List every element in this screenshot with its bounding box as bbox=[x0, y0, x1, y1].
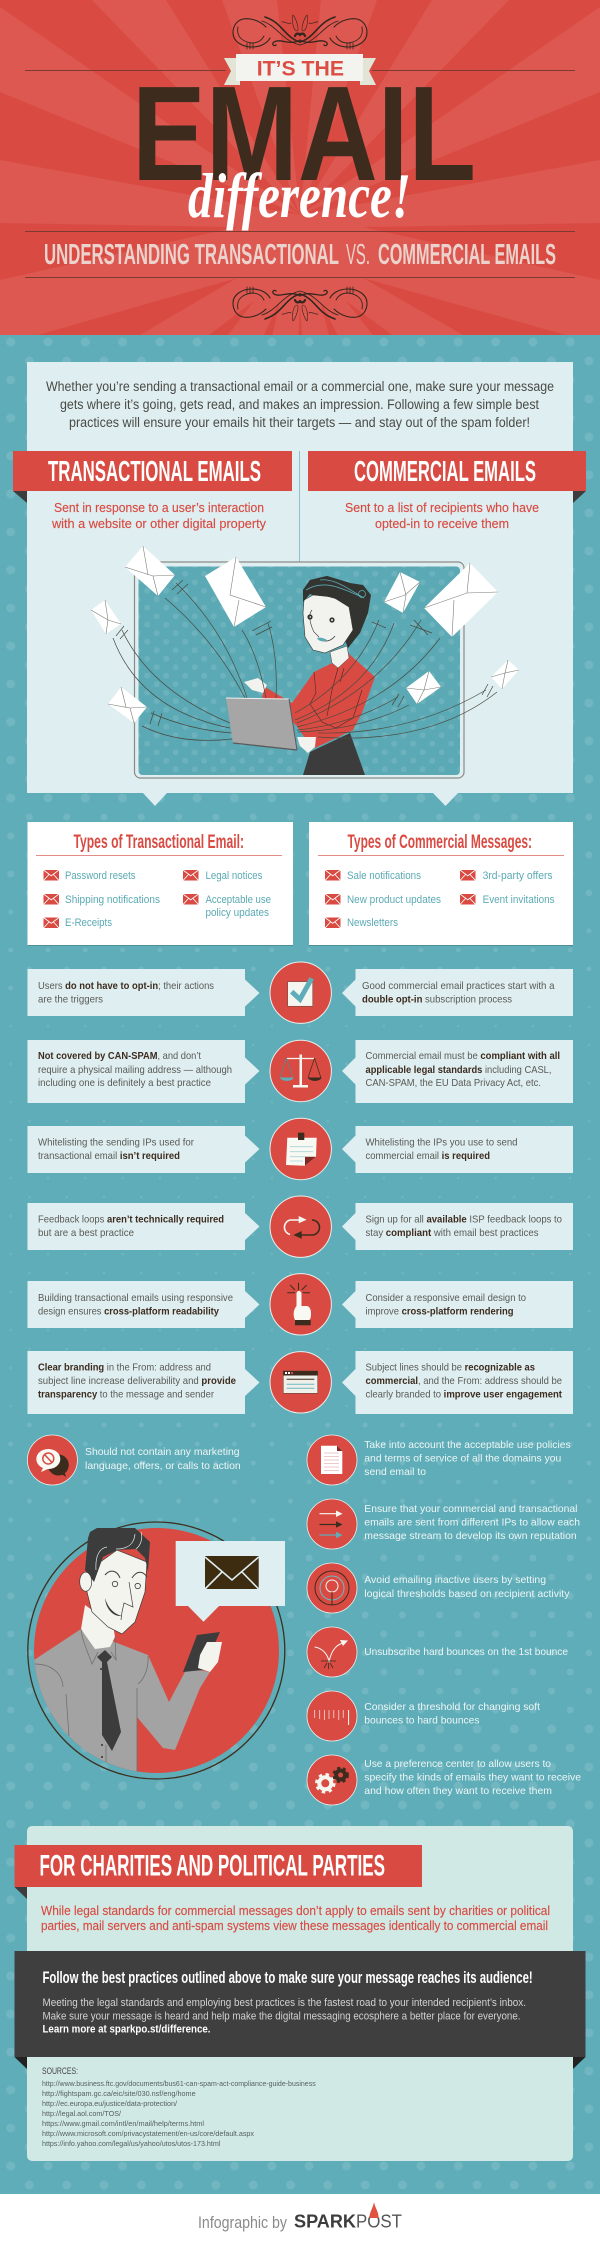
tip: soft bounces bbox=[307, 1691, 540, 1741]
left callout: Feedback loops aren’t technically required bbox=[38, 1214, 224, 1226]
tip: preference center: specify the kinds of emails they want to receive bbox=[364, 1772, 581, 1784]
sources: https://www.gmail.com/intl/en/mail/help/terms.html bbox=[42, 2119, 204, 2128]
right callout bbox=[342, 1126, 573, 1173]
tip: acceptable use policies bbox=[307, 1435, 571, 1485]
panel: intro and comparison bbox=[13, 362, 586, 806]
ribbon: it's the bbox=[224, 54, 376, 85]
transactional description bbox=[51, 500, 266, 531]
transactional description: with a website or other digital property bbox=[51, 516, 266, 531]
charities text: While legal standards for commercial messages don’t apply to emails sent by charities or political bbox=[41, 1903, 550, 1918]
list item: Legal notices bbox=[206, 870, 263, 882]
sources: https://info.yahoo.com/legal/us/yahoo/utos/utos-173.html bbox=[42, 2139, 221, 2148]
header rule lines bbox=[25, 70, 575, 278]
icon: browser window bbox=[270, 1352, 331, 1413]
tip: separate ips bbox=[307, 1499, 580, 1549]
right callout: Sign up for all available ISP feedback loops to bbox=[366, 1214, 562, 1226]
right callout bbox=[342, 1203, 573, 1250]
right callout: clearly branded to improve user engagement bbox=[366, 1390, 562, 1400]
left callout: transparency to the message and sender bbox=[38, 1390, 214, 1400]
header sunburst bbox=[0, 0, 600, 335]
tip: no marketing language: language, offers, or calls to action bbox=[85, 1461, 241, 1472]
list item: Sale notifications bbox=[347, 870, 421, 882]
icon: flame bbox=[369, 2202, 379, 2218]
speech bubble with envelope bbox=[176, 1541, 285, 1622]
right callout: CAN-SPAM, the EU Data Privacy Act, etc. bbox=[366, 1078, 541, 1089]
right callout: Subject lines should be recognizable as bbox=[366, 1362, 535, 1374]
icon: checkbox bbox=[270, 962, 331, 1023]
right callout: commercial, and the From: address should be bbox=[366, 1376, 562, 1387]
tip: acceptable use policies: Take into account the acceptable use policies bbox=[364, 1440, 571, 1451]
subtitle: VS. bbox=[346, 239, 370, 271]
phone and hand bbox=[183, 1632, 222, 1672]
right callout bbox=[342, 969, 573, 1016]
man head and tie bbox=[80, 1528, 150, 1751]
left callout bbox=[28, 1203, 260, 1250]
list item bbox=[44, 870, 136, 882]
right callout: Whitelisting the IPs you use to send bbox=[366, 1138, 518, 1148]
row: feedback loops bbox=[28, 1196, 573, 1257]
heading: Types of Transactional Email: bbox=[74, 831, 244, 853]
footer credit: SPARK bbox=[294, 2212, 356, 2232]
right callout bbox=[342, 1351, 573, 1414]
tip: soft bounces: bounces to hard bounces bbox=[364, 1716, 480, 1726]
tip: preference center: and how often they want to receive them bbox=[364, 1786, 552, 1797]
row: branding bbox=[28, 1351, 573, 1414]
man body bbox=[34, 1629, 210, 1772]
left callout bbox=[28, 1040, 260, 1103]
sources: http://legal.aol.com/TOS/ bbox=[42, 2109, 122, 2118]
tip: no marketing language: Should not contain any marketing bbox=[85, 1447, 240, 1458]
top ornament bbox=[233, 15, 367, 49]
commercial description: Sent to a list of recipients who have bbox=[345, 500, 539, 515]
left callout: require a physical mailing address — although bbox=[38, 1065, 232, 1076]
right callout bbox=[342, 1281, 573, 1328]
list item: Newsletters bbox=[347, 917, 398, 929]
icon: bounce bbox=[307, 1627, 357, 1677]
tip: soft bounces: Consider a threshold for changing soft bbox=[364, 1702, 540, 1713]
icon: loop bbox=[270, 1196, 331, 1257]
left callout: transactional email isn’t required bbox=[38, 1151, 180, 1162]
band: call to action: Make sure your message is heard and help make the digital messaging ecosphere a better place for everyone. bbox=[42, 2010, 520, 2022]
list item: E-Receipts bbox=[65, 917, 112, 929]
woman bbox=[244, 576, 375, 775]
right callout bbox=[342, 1040, 573, 1103]
left callout: including one is definitely a best practice bbox=[38, 1078, 211, 1089]
left callout: Not covered by CAN-SPAM, and don’t bbox=[38, 1051, 201, 1062]
icon: scales bbox=[270, 1040, 331, 1102]
left callout: Whitelisting the sending IPs used for bbox=[38, 1138, 194, 1148]
list item bbox=[44, 917, 112, 929]
left callout bbox=[28, 969, 260, 1016]
tip: acceptable use policies: send email to bbox=[364, 1467, 426, 1478]
row: responsive bbox=[28, 1274, 573, 1335]
footer credit bbox=[198, 2202, 402, 2232]
tip: preference center: Use a preference center to allow users to bbox=[364, 1759, 551, 1770]
right callout: stay compliant with email best practices bbox=[366, 1228, 538, 1239]
icon: note bbox=[270, 1118, 331, 1180]
icon: document bbox=[307, 1435, 357, 1485]
charities text bbox=[41, 1903, 550, 1933]
list item: Acceptable use bbox=[206, 894, 271, 906]
list item: Event invitations bbox=[483, 894, 555, 906]
icon: gears bbox=[307, 1755, 357, 1805]
band: call to action: Meeting the legal standards and employing best practices is the fastest road to your intended recipient’s inbox. bbox=[42, 1997, 526, 2009]
transactional description: Sent in response to a user’s interaction bbox=[54, 500, 264, 515]
illustration: woman sending emails bbox=[91, 546, 519, 778]
icon: arrows bbox=[307, 1499, 357, 1549]
right callout: Consider a responsive email design to bbox=[366, 1293, 526, 1304]
list item: policy updates bbox=[206, 907, 269, 919]
tip: separate ips: Ensure that your commercial and transactional bbox=[364, 1504, 578, 1515]
panel: types of transactional email bbox=[28, 822, 293, 946]
list item bbox=[325, 917, 398, 929]
right callout: double opt-in subscription process bbox=[362, 994, 512, 1006]
intro text: gets where it’s going, gets read, and makes an impression. Following a few simple best bbox=[60, 397, 539, 412]
left callout: but are a best practice bbox=[38, 1228, 134, 1239]
icon: bars bbox=[307, 1691, 357, 1741]
sources: http://www.business.ftc.gov/documents/bus61-can-spam-act-compliance-guide-business bbox=[42, 2079, 316, 2088]
left callout bbox=[28, 1281, 260, 1328]
list item: 3rd-party offers bbox=[483, 870, 553, 882]
left callout: Building transactional emails using responsive bbox=[38, 1293, 233, 1304]
list item: Password resets bbox=[65, 870, 136, 882]
tip: separate ips: emails are sent from different IPs to allow each bbox=[364, 1518, 580, 1528]
banner: commercial emails bbox=[308, 451, 586, 503]
flying envelopes bbox=[91, 546, 519, 723]
banner: charities bbox=[14, 1845, 422, 1899]
email trajectories bbox=[113, 580, 497, 740]
list item: Shipping notifications bbox=[65, 894, 160, 906]
tip: inactive users: logical thresholds based on recipient activity bbox=[364, 1589, 570, 1600]
sources: SOURCES: bbox=[42, 2066, 78, 2077]
intro text bbox=[46, 379, 554, 430]
subtitle: UNDERSTANDING TRANSACTIONAL bbox=[44, 239, 339, 271]
sources: http://fightspam.gc.ca/eic/site/030.nsf/eng/home bbox=[42, 2089, 196, 2098]
icon: no speech bubble bbox=[27, 1435, 77, 1485]
commercial description: opted-in to receive them bbox=[375, 516, 509, 531]
row: can-spam bbox=[28, 1040, 573, 1103]
title: difference!: difference! bbox=[188, 160, 411, 231]
intro text: Whether you’re sending a transactional email or a commercial one, make sure your message bbox=[46, 379, 554, 394]
tip: hard bounces: Unsubscribe hard bounces on the 1st bounce bbox=[364, 1647, 568, 1658]
right callout: commercial email is required bbox=[366, 1151, 490, 1162]
row: whitelisting bbox=[28, 1118, 573, 1180]
laptop bbox=[226, 698, 297, 750]
left callout: design ensures cross-platform readability bbox=[38, 1306, 219, 1318]
right callout: Good commercial email practices start with a bbox=[362, 981, 555, 992]
tip: acceptable use policies: and terms of service of all the domains you bbox=[364, 1454, 562, 1464]
left callout: are the triggers bbox=[38, 994, 103, 1006]
sources: http://ec.europa.eu/justice/data-protection/ bbox=[42, 2099, 178, 2108]
ribbon: it's the: IT’S THE bbox=[257, 57, 344, 81]
intro text: practices will ensure your emails hit their targets — and stay out of the spam folder! bbox=[69, 415, 530, 430]
list item: New product updates bbox=[347, 894, 441, 906]
sources: http://www.microsoft.com/privacystatement/en-us/core/default.aspx bbox=[42, 2129, 254, 2138]
left callout: subject line increase deliverability and provide bbox=[38, 1376, 236, 1387]
tip: hard bounces bbox=[307, 1627, 568, 1677]
band: call to action: Learn more at sparkpo.st/difference. bbox=[42, 2024, 210, 2036]
tip: preference center bbox=[307, 1755, 581, 1805]
right callout: applicable legal standards including CASL, bbox=[366, 1065, 552, 1076]
bottom ornament bbox=[233, 287, 367, 321]
commercial description bbox=[345, 500, 539, 531]
panel: charities and closing bbox=[14, 1826, 586, 2161]
footer credit: POST bbox=[356, 2212, 402, 2232]
list item bbox=[183, 870, 263, 882]
left callout: Clear branding in the From: address and bbox=[38, 1362, 211, 1374]
tip: inactive users: Avoid emailing inactive users by setting bbox=[364, 1575, 546, 1586]
left callout bbox=[28, 1126, 260, 1173]
tip: inactive users bbox=[307, 1563, 570, 1613]
row: opt-in bbox=[28, 962, 573, 1023]
tip: separate ips: message stream to develop its own reputation bbox=[364, 1531, 577, 1542]
tip: no marketing language bbox=[27, 1435, 241, 1485]
banner: transactional emails: TRANSACTIONAL EMAILS bbox=[48, 456, 261, 488]
sources bbox=[42, 2066, 316, 2148]
right callout: Commercial email must be compliant with all bbox=[366, 1051, 560, 1062]
charities text: parties, mail servers and anti-spam systems view these messages identically to commercial email bbox=[41, 1918, 548, 1933]
band: call to action bbox=[14, 1951, 586, 2069]
left callout bbox=[28, 1351, 260, 1414]
banner: transactional emails bbox=[13, 451, 292, 503]
illustration: man with phone bbox=[20, 1522, 285, 1780]
left callout: Users do not have to opt-in; their actions bbox=[38, 981, 214, 992]
panel: types of commercial messages bbox=[309, 822, 573, 946]
title: email: EMAIL bbox=[132, 58, 476, 209]
list item bbox=[183, 894, 271, 919]
icon: target bbox=[307, 1563, 357, 1613]
footer credit: Infographic by bbox=[198, 2213, 287, 2232]
icon: pointing hand bbox=[270, 1274, 331, 1335]
right callout: improve cross-platform rendering bbox=[366, 1306, 514, 1318]
